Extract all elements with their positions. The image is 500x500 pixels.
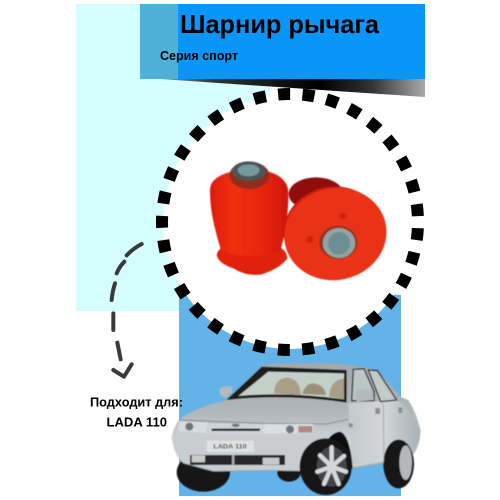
front right wheel	[300, 438, 352, 495]
right bushing centre	[319, 226, 357, 259]
hood crease	[180, 419, 348, 424]
left bushing flange	[217, 247, 287, 275]
panel: cyan background	[76, 4, 270, 311]
car body	[172, 363, 421, 472]
subtitle: Серия спорт	[160, 49, 238, 63]
side windows	[352, 369, 374, 401]
middle far wheel	[277, 464, 301, 482]
panel: blue background	[179, 283, 401, 496]
windshield glass	[238, 372, 344, 399]
fitment text: Подходит для:	[90, 394, 183, 410]
white circle	[163, 95, 417, 349]
right bushing disc	[276, 178, 395, 290]
dashed ring	[162, 94, 418, 350]
lower grille and fog lights	[190, 455, 285, 465]
door seam	[382, 403, 385, 462]
right bushing back	[289, 177, 343, 211]
door panels	[348, 400, 420, 467]
title: Шарнир рычага	[180, 9, 380, 39]
left bushing body	[210, 172, 288, 256]
seats	[274, 378, 301, 395]
header shadow	[160, 79, 425, 97]
car: silver LADA 110	[172, 363, 421, 495]
door handles	[349, 407, 402, 427]
grille	[207, 423, 265, 434]
fitment text: LADA 110	[106, 414, 167, 430]
side mirrors	[219, 386, 233, 398]
rear wheel	[383, 440, 414, 488]
licence plate	[207, 441, 254, 452]
front wheel arch	[317, 432, 353, 472]
panel: header band	[140, 4, 425, 79]
front left wheel	[177, 453, 230, 492]
dashed arrow	[112, 244, 142, 377]
left bushing collar	[229, 162, 269, 189]
product photo: two red bushings	[210, 161, 395, 290]
car: silver LADA 110: LADA 110	[213, 444, 247, 451]
fitment text	[90, 394, 183, 430]
windshield frame	[227, 367, 347, 403]
bumper	[173, 435, 328, 471]
headlights	[177, 421, 208, 433]
right bushing disc rim	[275, 177, 390, 284]
